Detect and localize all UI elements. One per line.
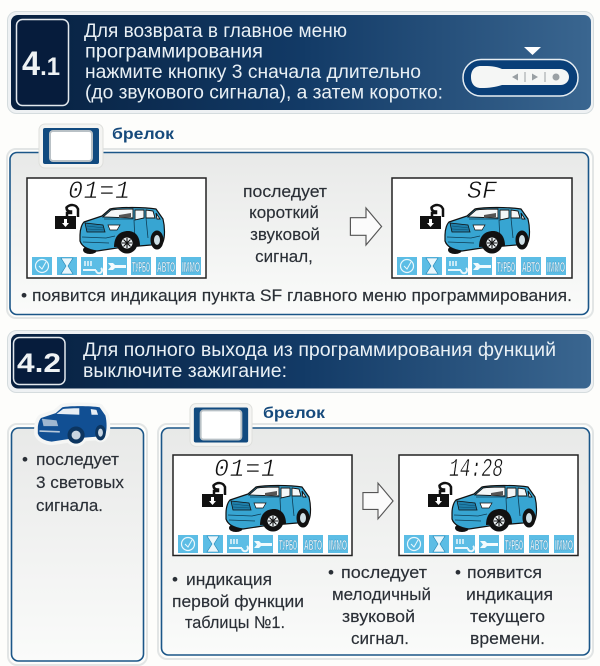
instruction text 4.1: нажмите кнопку 3 сначала длительно — [85, 62, 421, 83]
icon: fob screen — [39, 124, 103, 168]
badge 4.1: 4.1 — [22, 45, 60, 83]
LCD display: 14:28: АВТО — [530, 537, 548, 554]
text: short beep: короткий — [249, 203, 319, 222]
LCD display: SF: АВТО — [522, 259, 540, 276]
LCD display: 01=1: АВТО — [157, 259, 175, 276]
text: short beep: сигнал, — [255, 247, 313, 266]
text: SF indication: • появится индикация пункта SF главного меню программирования. — [21, 286, 572, 305]
panel: car lights — [8, 406, 147, 665]
badge 4.2: 4.2 — [17, 348, 61, 378]
LCD display: 01=1 — [173, 455, 352, 556]
icon: blue car — [38, 406, 109, 446]
text: current time indication — [455, 563, 553, 648]
text: current time indication: появится — [467, 563, 542, 582]
text: first function indication: таблицы №1. — [185, 613, 285, 632]
label: брелок: брелок — [263, 405, 325, 422]
instruction text 4.1: (до звукового сигнала), а затем коротко: — [85, 82, 443, 104]
instruction text 4.2: Для полного выхода из программирования функций — [83, 340, 556, 361]
LCD display: 01=1: IMMO — [182, 259, 200, 276]
instruction text 4.2 — [83, 340, 556, 382]
icon: fob screen — [190, 404, 252, 446]
banner 4.1 — [8, 12, 594, 114]
instruction text 4.2: выключите зажигание: — [83, 361, 287, 382]
LCD display: 01=1: IMMO — [329, 537, 347, 554]
text: melodic beep: последует — [341, 563, 427, 582]
text: melodic beep: • — [328, 563, 334, 582]
text: current time indication: • — [455, 563, 461, 582]
text: 3 light signals: 3 световых — [36, 473, 124, 492]
panel: fob result 4.2 — [158, 404, 593, 659]
text: short beep: последует — [243, 182, 327, 201]
badge 4.1 — [16, 20, 68, 106]
text: current time indication: индикация — [466, 585, 553, 604]
LCD display: 01=1: ТУРБО — [279, 537, 297, 554]
instruction text 4.1: программирования — [85, 42, 263, 62]
LCD display: 14:28 — [399, 454, 578, 556]
banner 4.2 — [8, 330, 594, 392]
LCD display: 01=1: 01=1 — [68, 177, 130, 206]
text: current time indication: текущего — [470, 607, 545, 626]
text: first function indication — [172, 570, 304, 632]
panel: fob result 4.1 — [7, 124, 593, 318]
LCD display: SF: IMMO — [547, 259, 565, 276]
instruction text 4.1: Для возврата в главное меню — [84, 21, 347, 42]
LCD display: 01=1: 01=1 — [214, 455, 276, 484]
arrow — [350, 208, 382, 245]
instruction text 4.1 — [84, 21, 443, 104]
text: short beep — [243, 182, 327, 266]
text: melodic beep: мелодичный — [332, 585, 431, 604]
LCD display: SF: SF — [467, 177, 498, 206]
icon: key fob button — [463, 47, 578, 96]
LCD display: 14:28: 14:28 — [449, 454, 503, 484]
LCD display: 01=1 — [27, 177, 206, 278]
text: first function indication: индикация — [186, 570, 272, 589]
LCD display: 01=1: АВТО — [304, 537, 322, 554]
text: melodic beep: звуковой — [342, 607, 415, 626]
text: melodic beep — [328, 563, 431, 648]
LCD display: 14:28: ТУРБО — [505, 537, 523, 554]
arrow — [363, 483, 393, 519]
LCD display: 14:28: IMMO — [555, 537, 573, 554]
text: 3 light signals: последует — [36, 450, 119, 469]
text: 3 light signals — [22, 450, 124, 515]
text: melodic beep: сигнал. — [351, 629, 409, 648]
text: first function indication: первой функции — [172, 592, 304, 611]
text: 3 light signals: • — [22, 450, 28, 469]
label: брелок: брелок — [112, 126, 174, 143]
badge 4.2 — [14, 338, 65, 384]
text: short beep: звуковой — [250, 225, 320, 244]
LCD display: SF — [392, 177, 572, 278]
LCD display: 01=1: ТУРБО — [132, 259, 150, 276]
text: current time indication: времени. — [470, 629, 545, 648]
text: 3 light signals: сигнала. — [36, 496, 103, 515]
text: first function indication: • — [172, 570, 178, 589]
LCD display: SF: ТУРБО — [497, 259, 515, 276]
